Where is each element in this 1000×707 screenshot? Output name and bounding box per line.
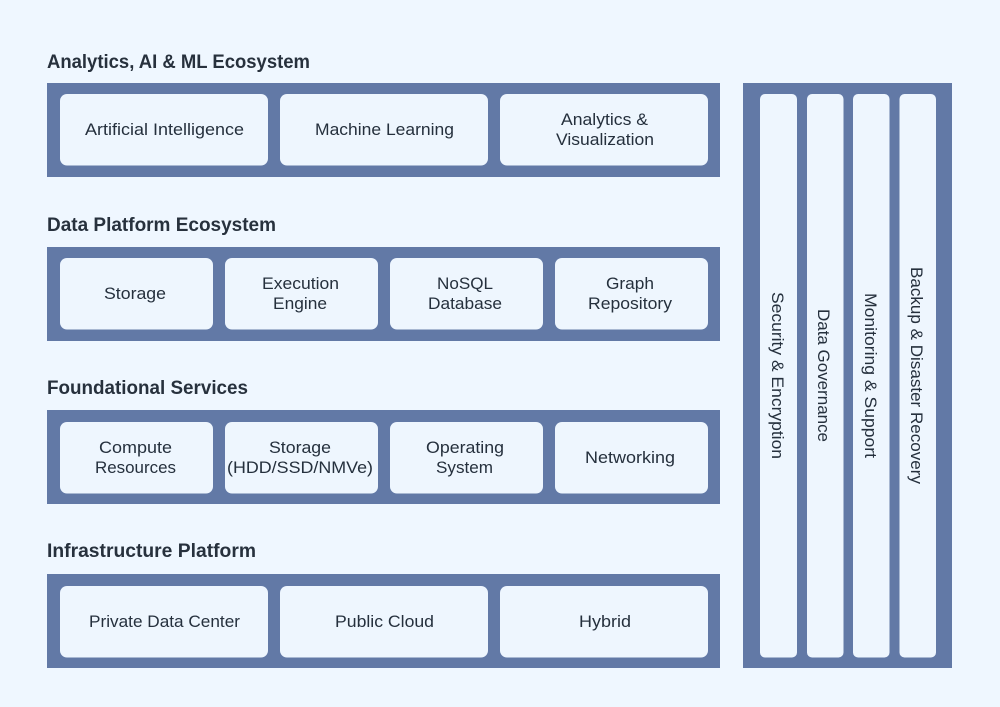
card: NoSQL Database bbox=[390, 258, 543, 330]
card: Compute Resources bbox=[60, 422, 213, 494]
card: Storage bbox=[60, 258, 213, 330]
card: Machine Learning bbox=[280, 94, 488, 166]
card: Execution Engine: Execution bbox=[262, 274, 339, 293]
card: NoSQL Database: NoSQL bbox=[437, 274, 493, 293]
heading: Data Platform Ecosystem: Data Platform Ecosystem bbox=[47, 215, 276, 236]
column: Monitoring & Support: Monitoring & Support bbox=[861, 293, 880, 458]
card: Storage (HDD/SSD/NMVe): (HDD/SSD/NMVe) bbox=[227, 458, 373, 477]
card: Storage (HDD/SSD/NMVe) bbox=[225, 422, 378, 494]
card: Graph Repository: Graph bbox=[606, 274, 654, 293]
card: Analytics & Visualization: Visualization bbox=[556, 130, 654, 149]
card: Execution Engine bbox=[225, 258, 378, 330]
card: Public Cloud: Public Cloud bbox=[335, 612, 434, 631]
column: Backup & Disaster Recovery bbox=[900, 94, 936, 658]
panel: infrastructure layer bbox=[47, 574, 720, 668]
card: Private Data Center bbox=[60, 586, 268, 658]
card: NoSQL Database: Database bbox=[428, 294, 502, 313]
card: Networking bbox=[555, 422, 708, 494]
card: Graph Repository: Repository bbox=[588, 294, 673, 313]
card: Storage (HDD/SSD/NMVe): Storage bbox=[269, 438, 331, 457]
card: Machine Learning: Machine Learning bbox=[315, 120, 454, 139]
panel: foundational services layer bbox=[47, 410, 720, 504]
column: Data Governance bbox=[807, 94, 844, 658]
card: Networking: Networking bbox=[585, 448, 675, 467]
card: Analytics & Visualization: Analytics & bbox=[561, 110, 649, 129]
column: Security & Encryption: Security & Encryption bbox=[768, 292, 787, 459]
card: Artificial Intelligence bbox=[60, 94, 268, 166]
card: Operating System: System bbox=[436, 458, 493, 477]
column: Security & Encryption bbox=[760, 94, 797, 658]
card: Private Data Center: Private Data Center bbox=[89, 612, 240, 631]
card: Storage: Storage bbox=[104, 284, 166, 303]
column: Monitoring & Support bbox=[853, 94, 890, 658]
heading: Infrastructure Platform: Infrastructure Platform bbox=[47, 541, 256, 562]
card: Operating System bbox=[390, 422, 543, 494]
heading: Foundational Services: Foundational Services bbox=[47, 378, 248, 399]
card: Artificial Intelligence: Artificial Intelligence bbox=[85, 120, 244, 139]
panel: cross-cutting concerns bbox=[743, 83, 952, 668]
card: Graph Repository bbox=[555, 258, 708, 330]
column: Backup & Disaster Recovery: Backup & Disaster Recovery bbox=[907, 267, 926, 484]
panel: data platform layer bbox=[47, 247, 720, 341]
column: Data Governance: Data Governance bbox=[814, 309, 833, 442]
card: Compute Resources: Compute bbox=[99, 438, 172, 457]
card: Hybrid bbox=[500, 586, 708, 658]
heading: Analytics, AI & ML Ecosystem: Analytics, AI & ML Ecosystem bbox=[47, 52, 310, 73]
card: Hybrid: Hybrid bbox=[579, 612, 631, 631]
card: Compute Resources: Resources bbox=[95, 458, 176, 477]
panel: analytics layer bbox=[47, 83, 720, 177]
card: Operating System: Operating bbox=[426, 438, 504, 457]
card: Execution Engine: Engine bbox=[273, 294, 327, 313]
card: Analytics & Visualization bbox=[500, 94, 708, 166]
card: Public Cloud bbox=[280, 586, 488, 658]
